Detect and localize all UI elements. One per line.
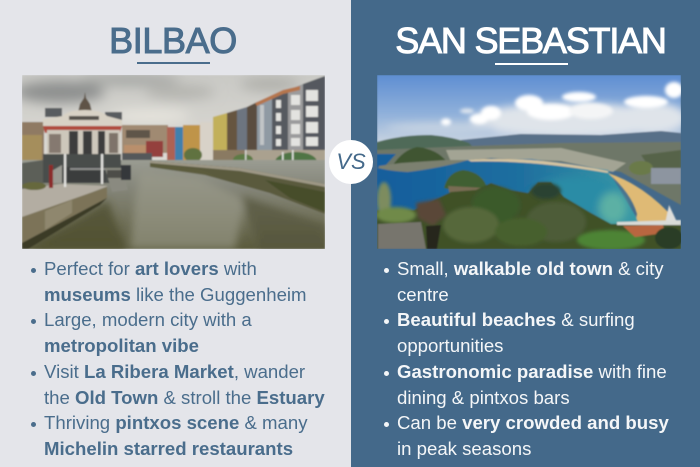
city	[376, 142, 680, 205]
clouds	[386, 102, 686, 137]
bullet 4	[384, 412, 669, 459]
bullet list: Bilbao: Perfect for art lovers with	[44, 258, 257, 279]
tennis courts	[616, 220, 680, 225]
trees	[184, 148, 202, 162]
distant buildings	[22, 122, 44, 164]
far bank wall	[150, 161, 325, 214]
bullet list: Bilbao: metropolitan vibe	[44, 335, 199, 356]
bullet 4	[31, 412, 308, 459]
bridge	[122, 153, 152, 163]
panel: San Sebastian	[351, 0, 700, 467]
bullet 2	[384, 309, 635, 356]
beach	[608, 173, 669, 222]
bullet list: Bilbao: Visit La Ribera Market, wander	[44, 361, 305, 382]
colourful facades	[167, 127, 175, 161]
water	[22, 160, 325, 249]
bullet list: San Sebastian: Gastronomic paradise with fine	[397, 361, 667, 382]
bullet list: San Sebastian: dining & pintxos bars	[397, 387, 570, 408]
panel: Bilbao	[0, 0, 351, 467]
bullet 2	[31, 309, 252, 356]
bullet list: San Sebastian: Can be very crowded and busy	[397, 412, 669, 433]
bullet list: San Sebastian: in peak seasons	[397, 438, 531, 459]
heading: San Sebastian: SAN SEBASTIAN	[395, 20, 666, 61]
heading underline	[495, 63, 568, 65]
bullet 3	[384, 361, 667, 408]
lamp posts and sculpture	[49, 165, 53, 188]
bullet list: Bilbao: museums like the Guggenheim	[44, 284, 307, 305]
bullet 3	[31, 361, 325, 408]
sea	[376, 154, 640, 232]
Urgull headland	[392, 147, 446, 170]
bullet list: San Sebastian	[384, 258, 669, 459]
foreground trees	[376, 182, 680, 249]
bullet list: Bilbao: the Old Town & stroll the Estuary	[44, 387, 325, 408]
VS badge	[329, 140, 373, 184]
bullet list: Bilbao: Large, modern city with a	[44, 309, 252, 330]
reflections on water	[30, 172, 325, 249]
heading: Bilbao: BILBAO	[109, 20, 237, 61]
market building	[45, 108, 62, 117]
bullet 1	[384, 258, 664, 305]
left street	[22, 160, 43, 190]
Santa Clara island	[444, 170, 488, 194]
bullet list: San Sebastian: opportunities	[397, 335, 503, 356]
quay	[22, 184, 108, 218]
bullet list: Bilbao: Michelin starred restaurants	[44, 438, 293, 459]
dock and stairs	[105, 168, 128, 192]
bullet list: San Sebastian: centre	[397, 284, 449, 305]
photo: Bilbao estuary and market	[22, 75, 325, 249]
bullet list: Bilbao: Thriving pintxos scene & many	[44, 412, 308, 433]
heading underline	[137, 62, 210, 64]
bullet list: San Sebastian: Small, walkable old town & city	[397, 258, 664, 279]
bullet list: Bilbao	[31, 258, 325, 459]
photo: La Concha bay	[377, 75, 681, 249]
mountains	[460, 131, 680, 155]
bullet list: San Sebastian: Beautiful beaches & surfing	[397, 309, 635, 330]
bullet 1	[31, 258, 307, 305]
VS badge: VS	[336, 149, 366, 174]
